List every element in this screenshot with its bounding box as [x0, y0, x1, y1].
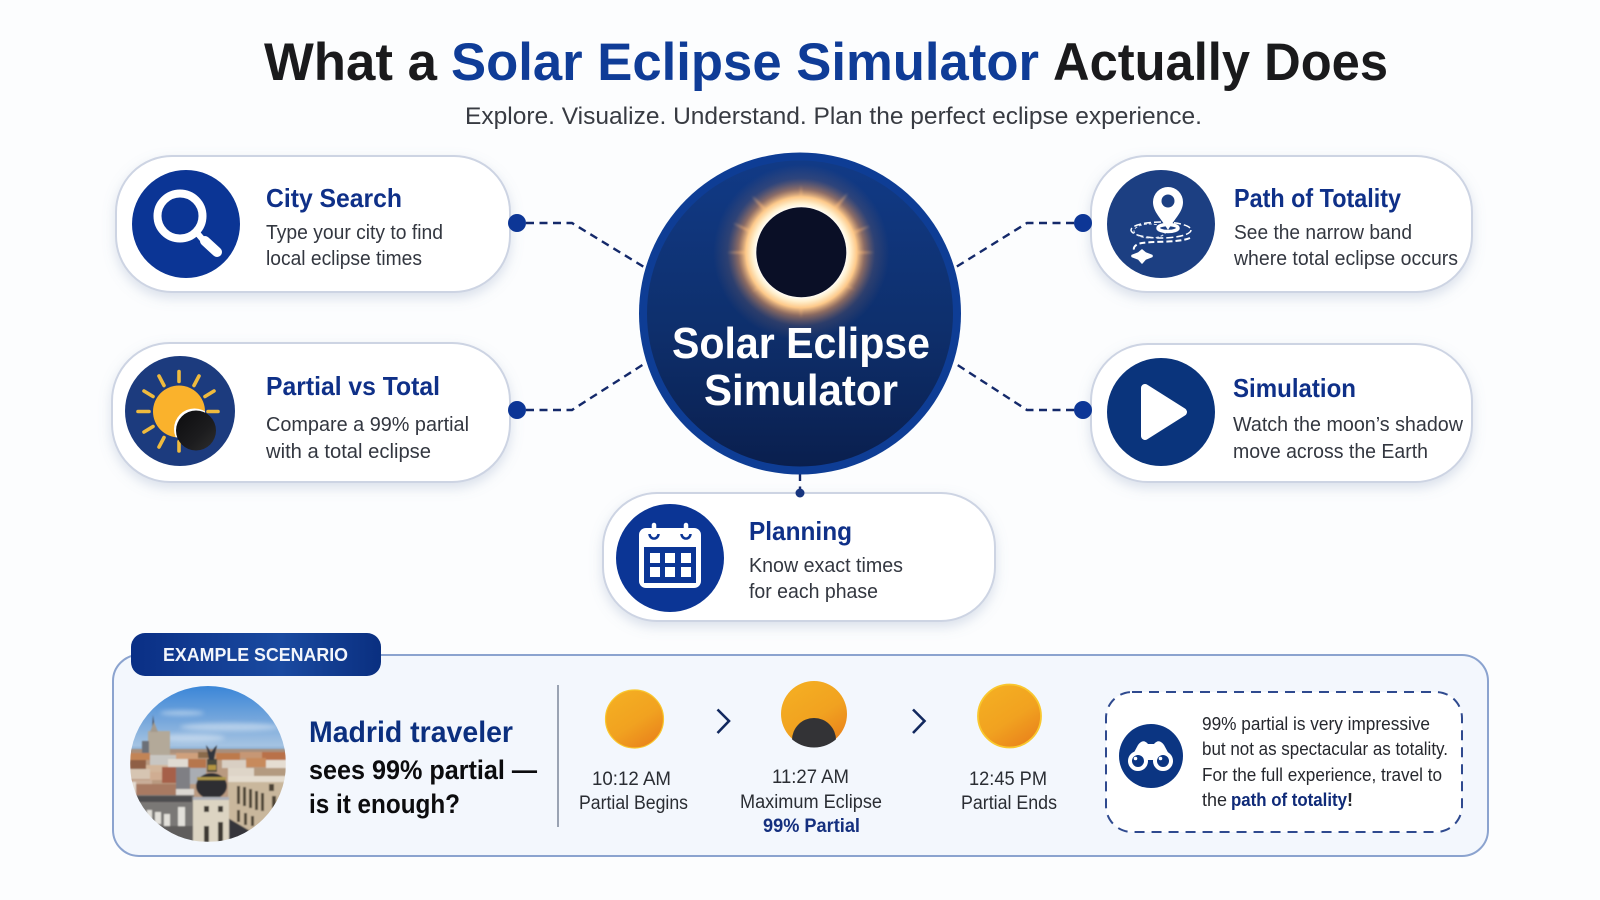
heading: city search: City Search [266, 183, 402, 213]
icon: binoculars [1119, 724, 1183, 788]
subtitle: Explore. Visualize. Understand. Plan the perfect eclipse experience. [465, 103, 1202, 130]
connectors between centre hub and feature cards [526, 223, 1074, 490]
icon: map pin with path [1107, 170, 1215, 278]
description: path of totality: See the narrow band [1234, 222, 1412, 244]
phase: maximum eclipse: Maximum Eclipse [740, 792, 882, 813]
icon: partially eclipsed sun [125, 356, 235, 466]
photo: Madrid skyline [130, 686, 286, 842]
scenario heading [309, 716, 537, 819]
description: partial vs total [265, 414, 469, 463]
callout text: the [1202, 790, 1227, 810]
arrow: to maximum eclipse [718, 710, 729, 733]
description: simulation [1233, 414, 1464, 463]
callout text: path of totality [1231, 790, 1347, 810]
description: simulation: move across the Earth [1233, 441, 1428, 463]
phase: partial begins: Partial Begins [579, 793, 688, 814]
description: city search: Type your city to find [266, 222, 443, 244]
scenario heading: is it enough? [309, 789, 460, 819]
description: planning: for each phase [749, 581, 878, 603]
description: city search: local eclipse times [266, 248, 422, 270]
description: city search [266, 222, 443, 270]
phase: partial ends: 12:45 PM [969, 769, 1047, 790]
tab: example scenario [131, 633, 381, 676]
phase: partial begins [579, 690, 688, 814]
title: Actually Does [1053, 33, 1388, 92]
icon: play button [1107, 358, 1215, 466]
connector dots [508, 214, 1092, 419]
icon: magnifying glass [132, 170, 240, 278]
phase: maximum eclipse: 11:27 AM [772, 767, 849, 788]
panel: planning [603, 488, 995, 621]
scenario heading: Madrid traveler [309, 716, 513, 749]
title: Solar Eclipse Simulator [451, 33, 1039, 92]
hub title: Simulator [704, 366, 898, 415]
hub title [672, 319, 930, 415]
description: path of totality [1233, 222, 1458, 270]
heading: path of totality: Path of Totality [1234, 183, 1401, 213]
scenario heading: sees 99% partial — [309, 755, 537, 785]
callout text [1202, 714, 1448, 810]
panel: simulation [1091, 344, 1472, 482]
description: planning: Know exact times [749, 555, 903, 577]
panel: path of totality [1091, 156, 1472, 292]
phase: partial begins: 10:12 AM [592, 769, 671, 790]
phase: partial ends: Partial Ends [961, 793, 1057, 814]
callout text: ! [1347, 790, 1353, 810]
tab: example scenario: EXAMPLE SCENARIO [163, 645, 348, 665]
description: partial vs total: with a total eclipse [265, 441, 431, 463]
panel: example scenario [113, 633, 1488, 856]
callout: verdict [1106, 692, 1462, 832]
description: planning [749, 555, 903, 603]
panel: city search [116, 156, 510, 292]
hub title: Solar Eclipse [672, 319, 930, 368]
phase: maximum eclipse: 99% Partial [763, 816, 860, 837]
phase: partial ends [961, 684, 1057, 814]
icon: calendar [616, 504, 724, 612]
description: partial vs total: Compare a 99% partial [266, 414, 469, 436]
panel: partial vs total [112, 343, 510, 482]
heading: planning: Planning [749, 516, 852, 546]
phase: maximum eclipse [740, 681, 882, 837]
callout text: For the full experience, travel to [1202, 765, 1442, 785]
description: simulation: Watch the moon’s shadow [1233, 414, 1464, 436]
title [264, 33, 1388, 92]
callout text: but not as spectacular as totality. [1202, 739, 1448, 759]
eclipse corona and moon [713, 164, 889, 340]
heading: partial vs total: Partial vs Total [266, 371, 440, 401]
title: What a [264, 33, 438, 92]
arrow: to partial ends [913, 710, 924, 733]
description: path of totality: where total eclipse occurs [1233, 248, 1458, 270]
panel: central hub [639, 152, 961, 474]
callout text: 99% partial is very impressive [1202, 714, 1430, 734]
connector dot: planning [796, 488, 804, 498]
heading: simulation: Simulation [1233, 373, 1356, 403]
